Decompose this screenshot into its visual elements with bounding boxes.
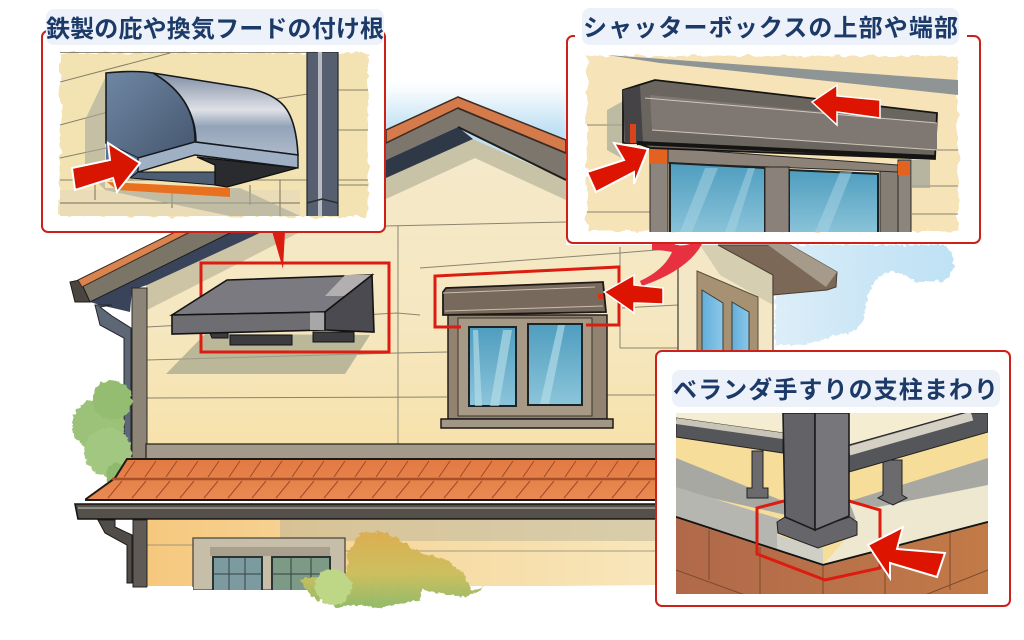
panel wall texture: [60, 53, 368, 216]
panel: veranda: [656, 351, 1010, 606]
ledge left: [676, 487, 822, 549]
panel: hood: [42, 9, 385, 232]
box: [623, 80, 937, 159]
wall shade under gable: [386, 139, 566, 200]
heading label: ベランダ手すりの支柱まわり: [673, 376, 998, 404]
main window: [435, 267, 619, 428]
downpipe: [307, 52, 338, 218]
lower roof: [75, 459, 656, 519]
panel illustration: [585, 55, 960, 237]
posts and frame: [650, 147, 668, 237]
window frame: [448, 315, 607, 419]
house wall, upper floor: [146, 139, 680, 446]
window sill: [441, 419, 613, 428]
gutter: [75, 504, 656, 519]
bush at bottom: [300, 532, 485, 607]
cream upper wall: [676, 413, 961, 444]
post base: [777, 517, 857, 548]
swoosh: [640, 244, 702, 286]
sky and cloud at right: [775, 245, 954, 345]
window panes: [469, 327, 516, 406]
post: [783, 413, 815, 530]
red hexagon: [757, 501, 880, 580]
lower floor wall: [98, 520, 656, 617]
panel frame: [567, 36, 980, 243]
gray floor: [676, 458, 988, 525]
lower post and pipe: [133, 520, 147, 587]
glass: [670, 163, 765, 236]
panel wall texture: [587, 56, 958, 231]
hood lip: [138, 142, 298, 172]
orange sealant: [107, 182, 230, 197]
horizontal band: [146, 444, 656, 459]
red bracket: [435, 267, 619, 327]
roof eave: [718, 245, 837, 295]
arrow: [72, 143, 140, 192]
callout pointer: [272, 231, 285, 269]
wing window: [697, 271, 758, 351]
bottom fade: [147, 587, 345, 600]
red highlight frame: [201, 263, 389, 352]
orange sealant: [650, 148, 667, 164]
panel illustration: [58, 52, 368, 218]
label gap: [575, 30, 967, 52]
heading label: 鉄製の庇や換気フードの付け根: [46, 16, 384, 43]
sky behind gable: [380, 84, 570, 164]
awning: [166, 263, 389, 374]
downpipe and corner post: [95, 288, 147, 460]
arrow: top: [812, 85, 880, 125]
shutter box: [443, 282, 606, 315]
ledge top: [823, 485, 988, 565]
heading label: シャッターボックスの上部や端部: [583, 15, 958, 42]
panel illustration: [676, 413, 988, 600]
left eave: [70, 232, 262, 312]
arrow: end: [587, 143, 648, 192]
siding lines: [147, 222, 680, 445]
brick: [676, 518, 988, 600]
shadow: [85, 78, 300, 216]
tree at left: [72, 380, 132, 487]
hood body: [153, 73, 298, 155]
lower window: [193, 538, 345, 590]
panel: shutter box: [567, 8, 980, 243]
shade under left eave: [146, 232, 300, 310]
gable roof: [386, 97, 566, 180]
awning shadow: [166, 334, 370, 374]
arrow: [868, 527, 945, 578]
small rail posts: [747, 451, 768, 498]
panel frame: [656, 351, 1010, 606]
panel frame: [42, 31, 385, 232]
arrow: main window: [604, 275, 663, 313]
rails: [676, 418, 783, 453]
right wing of the house: [678, 245, 837, 351]
